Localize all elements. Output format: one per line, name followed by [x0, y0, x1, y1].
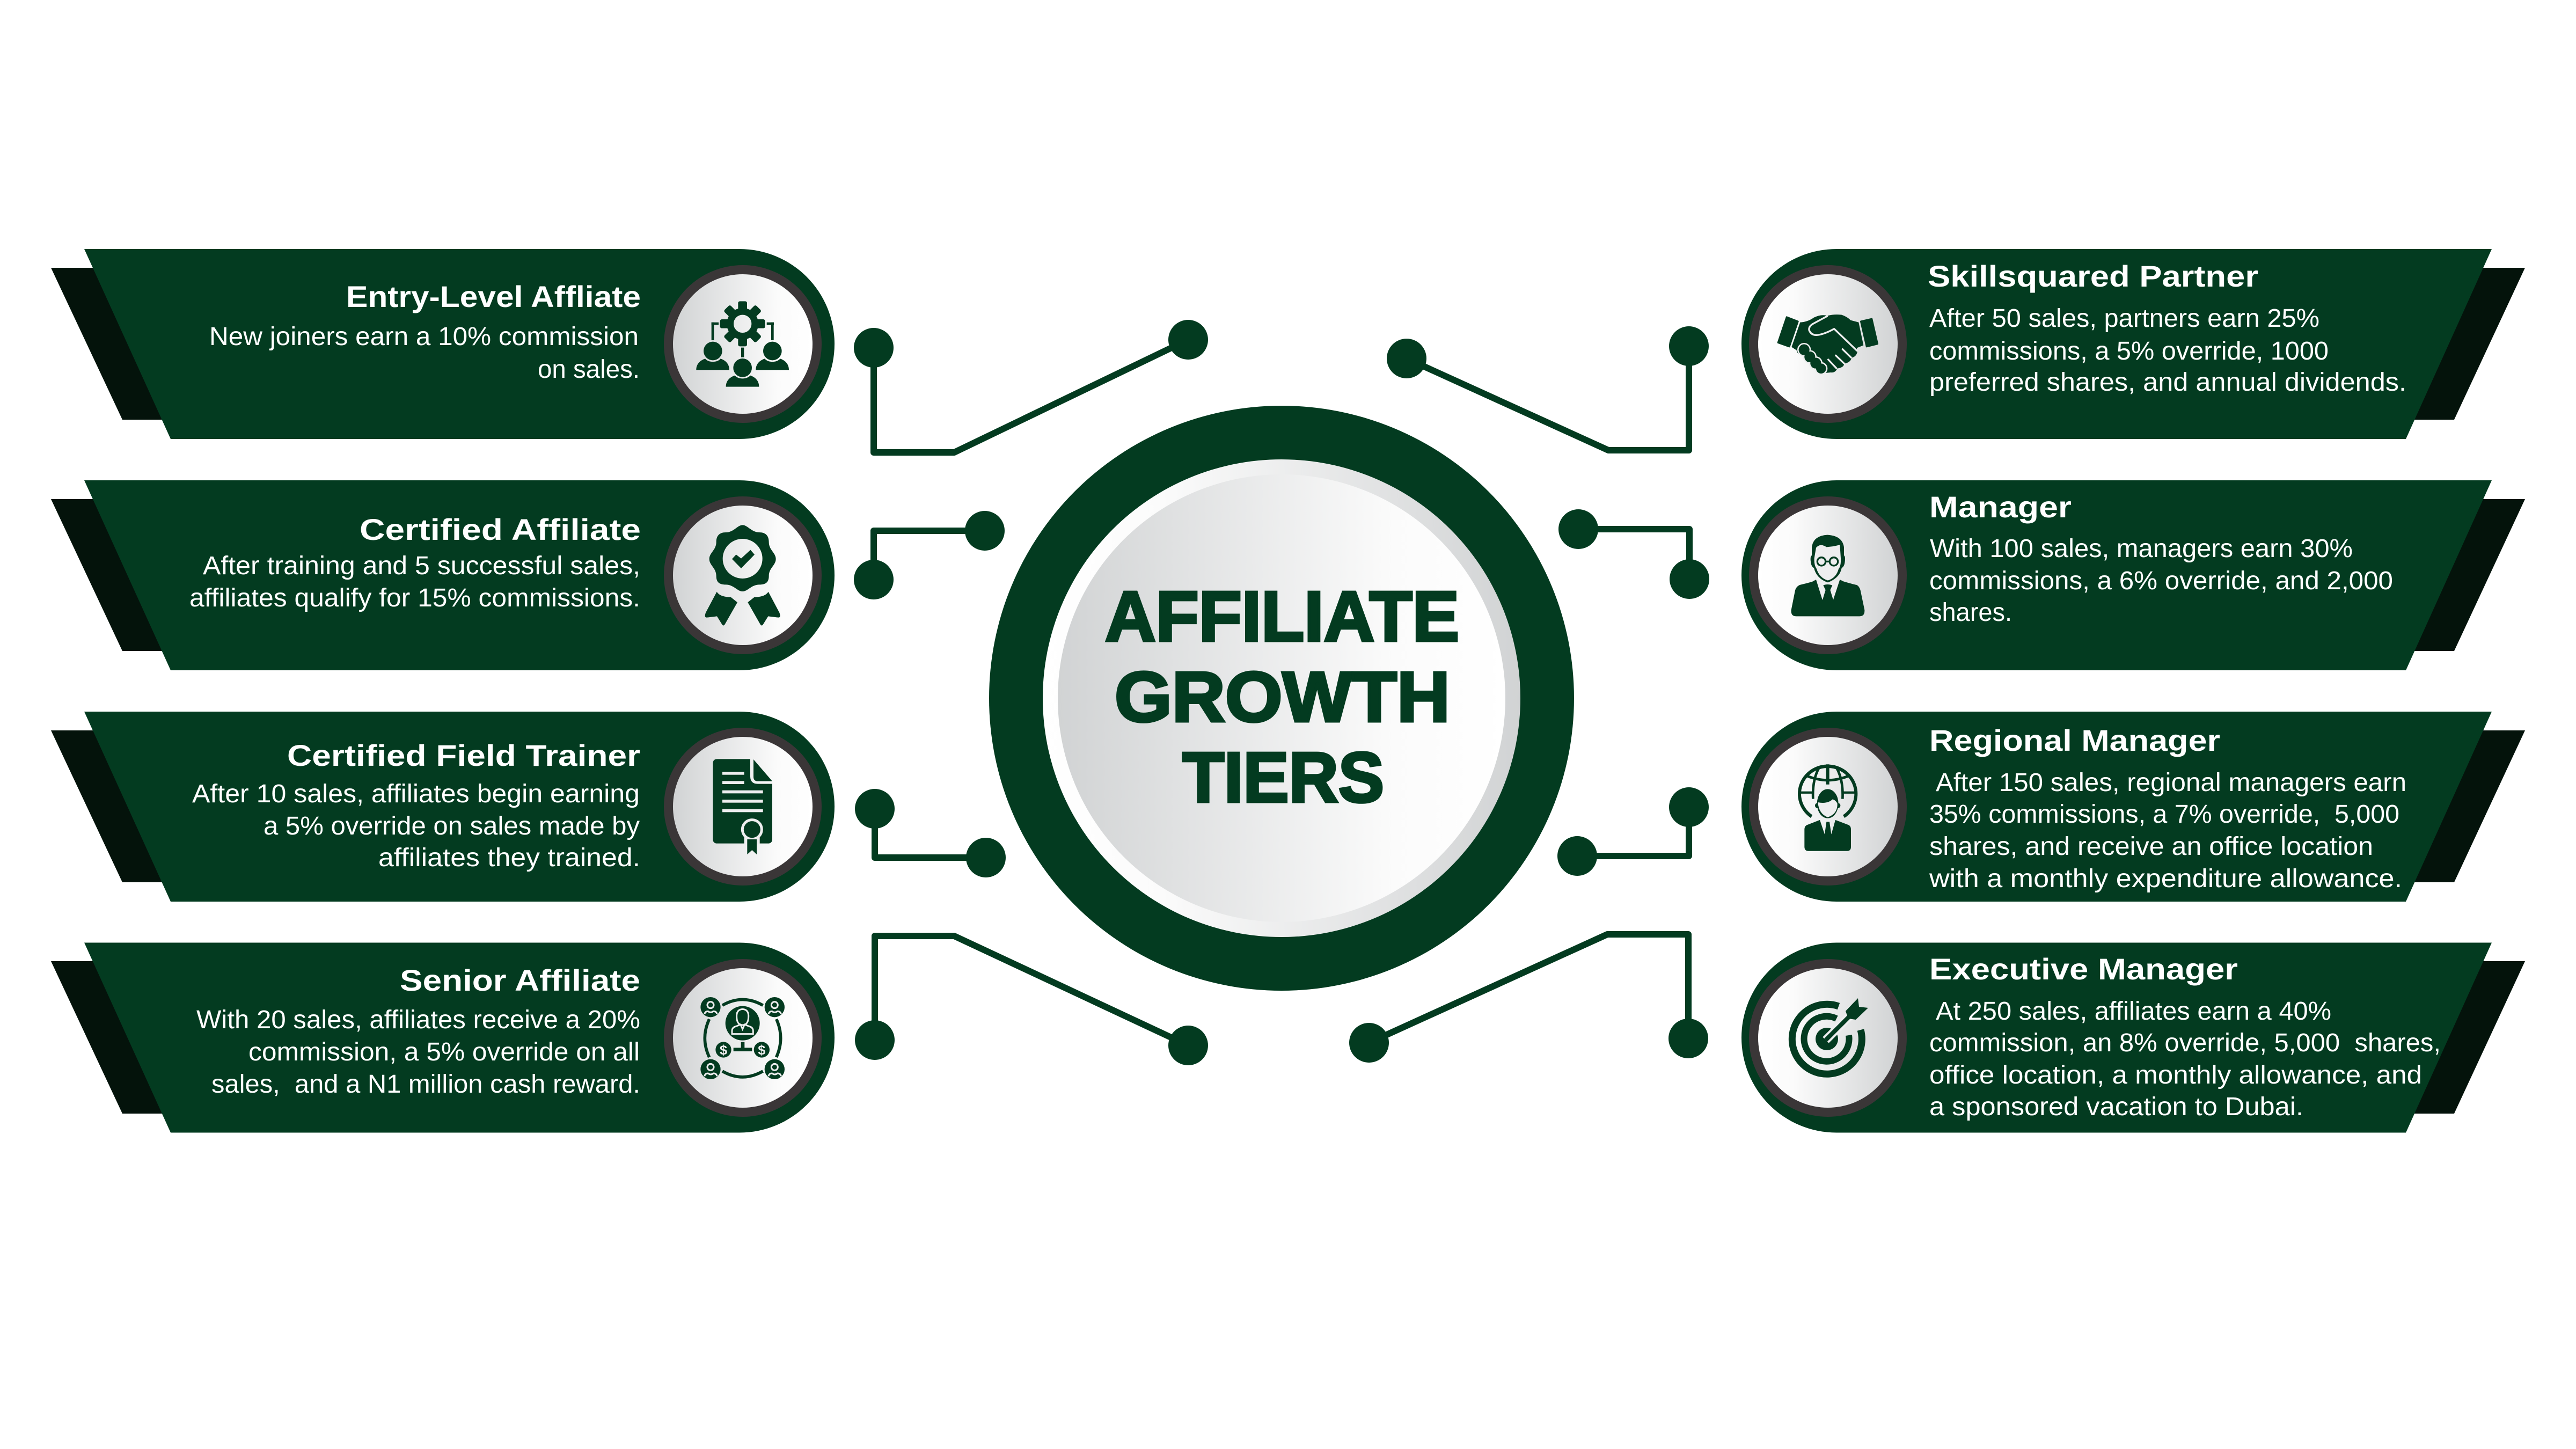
heading: Senior Affiliate: [400, 963, 640, 997]
panel: Entry-Level Affiliate: [51, 249, 835, 439]
description: shares.: [1929, 598, 2012, 627]
central hub: [989, 406, 1574, 991]
icon: network with money: $: [758, 1043, 765, 1058]
icon: globe and person: [1799, 764, 1856, 851]
description: [209, 323, 640, 384]
heading: Regional Manager: [1929, 723, 2220, 757]
panel: Regional Manager: [1741, 712, 2525, 902]
icon: target and arrow: [1792, 998, 1868, 1074]
description: shares, and receive an office location: [1929, 832, 2373, 861]
title: AFFILIATE: [1105, 577, 1459, 656]
connector: second left: [854, 511, 1005, 599]
description: After 10 sales, affiliates begin earning: [192, 780, 640, 808]
description: [1929, 535, 2393, 627]
panel: Manager: [1741, 480, 2525, 670]
description: With 20 sales, affiliates receive a 20%: [196, 1006, 640, 1034]
description: 35% commissions, a 7% override, 5,000: [1929, 800, 2399, 829]
panel: Executive Manager: [1741, 942, 2525, 1132]
description: [1929, 304, 2406, 397]
connector: top right: [1387, 326, 1709, 450]
description: commissions, a 6% override, and 2,000: [1929, 567, 2393, 595]
description: [192, 780, 640, 872]
description: [189, 552, 640, 612]
description: [1929, 769, 2406, 893]
description: New joiners earn a 10% commission: [209, 323, 639, 351]
connector: second right: [1558, 509, 1709, 599]
heading: Entry-Level Affliate: [346, 280, 641, 313]
description: sales, and a N1 million cash reward.: [211, 1070, 640, 1099]
icon: network with money: [700, 997, 785, 1079]
heading: Certified Affiliate: [360, 513, 641, 546]
heading: Skillsquared Partner: [1928, 259, 2258, 293]
description: with a monthly expenditure allowance.: [1929, 865, 2402, 893]
heading: Executive Manager: [1929, 952, 2238, 986]
title: [1105, 577, 1459, 817]
description: After training and 5 successful sales,: [203, 552, 640, 580]
icon: businessman with glasses: [1791, 535, 1864, 616]
description: commission, an 8% override, 5,000 shares,: [1929, 1029, 2441, 1057]
description: [1929, 997, 2441, 1121]
description: on sales.: [538, 355, 640, 384]
heading: Certified Field Trainer: [287, 738, 640, 772]
icon: handshake: [1778, 314, 1877, 374]
title: GROWTH: [1115, 657, 1450, 736]
description: affiliates qualify for 15% commissions.: [189, 584, 640, 612]
heading: Manager: [1929, 490, 2072, 524]
description: a sponsored vacation to Dubai.: [1929, 1093, 2303, 1121]
connector: third left: [855, 789, 1006, 877]
description: With 100 sales, managers earn 30%: [1930, 535, 2353, 563]
icon: award badge: [705, 525, 780, 625]
description: At 250 sales, affiliates earn a 40%: [1936, 997, 2331, 1026]
description: After 50 sales, partners earn 25%: [1929, 304, 2319, 333]
panel: Senior Affiliate: [51, 942, 835, 1132]
panel: Certified Field Trainer: [51, 712, 835, 902]
description: office location, a monthly allowance, and: [1929, 1061, 2422, 1089]
icon: team and gear: [696, 301, 789, 387]
connector: bottom right: [1349, 934, 1708, 1063]
description: commissions, a 5% override, 1000: [1929, 337, 2329, 365]
description: preferred shares, and annual dividends.: [1929, 368, 2406, 397]
panel: Skillsquared Partner: [1741, 249, 2525, 439]
description: affiliates they trained.: [378, 844, 640, 872]
connector: top left: [854, 320, 1208, 452]
description: After 150 sales, regional managers earn: [1936, 769, 2406, 797]
description: [196, 1006, 640, 1099]
panel: Certified Affiliate: [51, 480, 835, 670]
description: a 5% override on sales made by: [264, 812, 640, 840]
connector: bottom left: [855, 936, 1208, 1065]
title: TIERS: [1182, 738, 1384, 817]
connector: third right: [1557, 787, 1709, 876]
description: commission, a 5% override on all: [248, 1038, 640, 1066]
icon: network with money: $: [720, 1043, 727, 1058]
icon: certificate document: [713, 759, 772, 854]
